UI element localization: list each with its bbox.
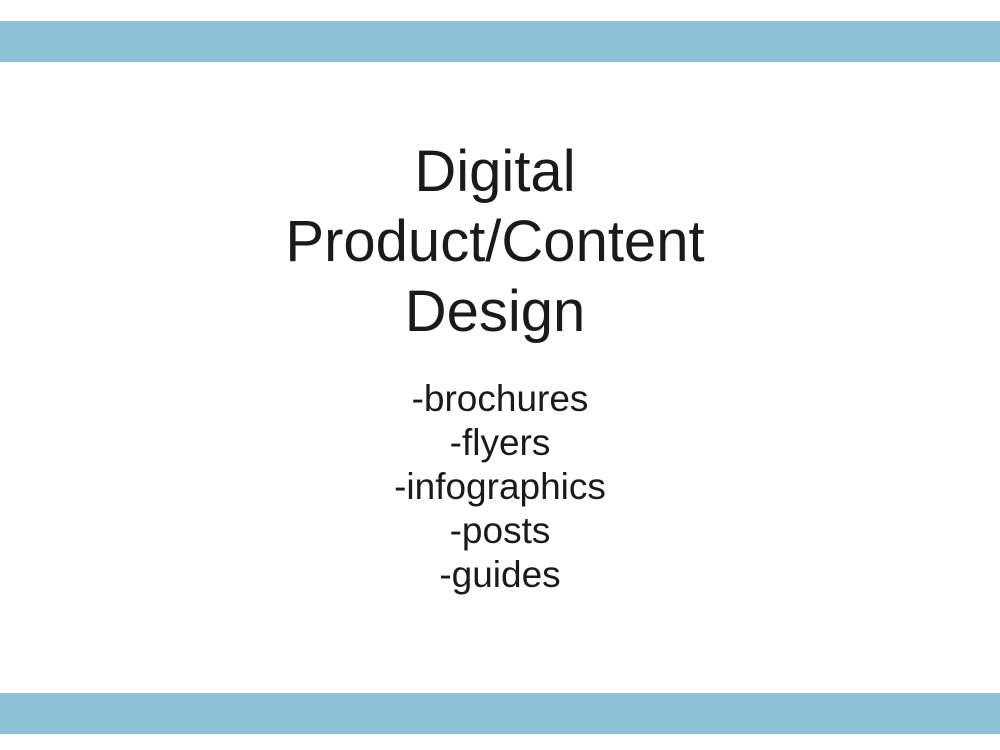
title: Design: [405, 279, 585, 344]
list of items: [394, 378, 606, 595]
list of items: -brochures: [412, 378, 588, 419]
list of items: -guides: [439, 554, 561, 595]
bottom bar: [0, 693, 1000, 734]
list of items: -posts: [450, 510, 550, 551]
list of items: -infographics: [394, 466, 606, 507]
top bar: [0, 21, 1000, 62]
title: [285, 139, 705, 344]
title: Digital: [414, 139, 576, 204]
list of items: -flyers: [450, 422, 550, 463]
title: Product/Content: [285, 209, 705, 274]
